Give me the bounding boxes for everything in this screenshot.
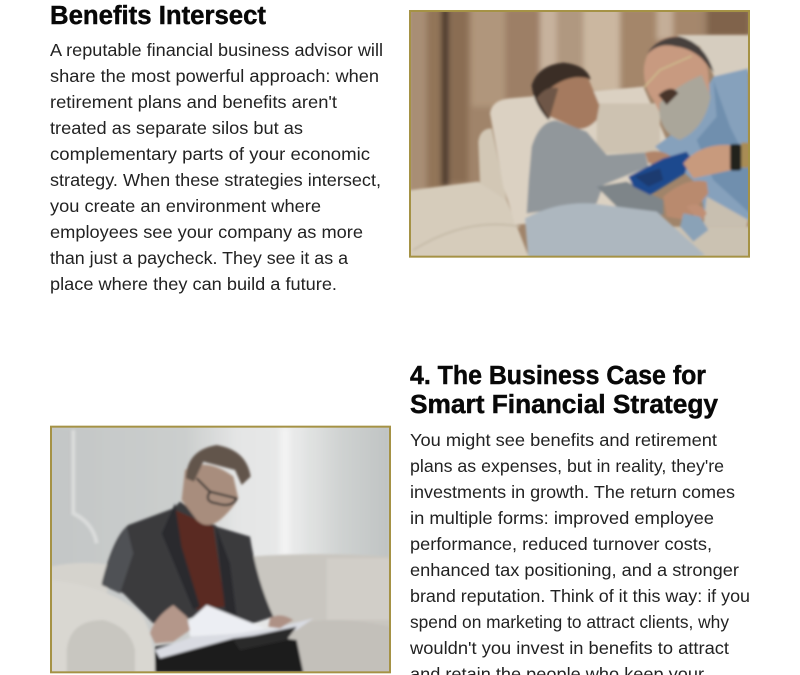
heading: Benefits Intersect: Benefits Intersect xyxy=(50,2,266,30)
text block: business case paragraph: You might see benefits and retirement xyxy=(410,430,717,450)
heading: 4. The Business Case for Smart Financial Strategy xyxy=(410,362,719,419)
text block: benefits paragraph: treated as separate silos but as xyxy=(50,118,303,138)
text block: business case paragraph: brand reputation. Think of it this way: if you xyxy=(410,586,750,606)
text block: benefits paragraph: share the most powerful approach: when xyxy=(50,66,379,86)
photo: grandfather and child on sofa xyxy=(407,7,753,260)
text block: benefits paragraph: retirement plans and benefits aren't xyxy=(50,92,337,112)
text block: business case paragraph: in multiple forms: improved employee xyxy=(410,508,714,528)
text block: business case paragraph: wouldn't you invest in benefits to attract xyxy=(409,638,729,658)
text block: benefits paragraph: complementary parts of your economic xyxy=(50,144,370,164)
text block: business case paragraph: plans as expenses, but in reality, they're xyxy=(410,456,724,476)
text block: benefits paragraph: A reputable financial business advisor will xyxy=(50,40,383,60)
text block: business case paragraph: spend on marketing to attract clients, why xyxy=(410,612,729,632)
text block: benefits paragraph: employees see your company as more xyxy=(50,222,363,242)
photo: man reviewing documents on sofa xyxy=(47,423,393,675)
heading: 4. The Business Case for Smart Financial Strategy: Smart Financial Strategy xyxy=(410,391,719,419)
text block: benefits paragraph: you create an environment where xyxy=(50,196,321,216)
text block: benefits paragraph: place where they can build a future. xyxy=(50,274,337,294)
text block: benefits paragraph: than just a paycheck. They see it as a xyxy=(50,248,348,268)
text block: business case paragraph: investments in growth. The return comes xyxy=(410,482,735,502)
text block: business case paragraph xyxy=(409,430,750,675)
text block: business case paragraph: enhanced tax positioning, and a stronger xyxy=(410,560,739,580)
text block: business case paragraph: performance, reduced turnover costs, xyxy=(410,534,712,554)
text block: benefits paragraph: strategy. When these strategies intersect, xyxy=(50,170,381,190)
heading: 4. The Business Case for Smart Financial Strategy: 4. The Business Case for xyxy=(410,362,706,390)
text block: benefits paragraph xyxy=(50,40,383,294)
